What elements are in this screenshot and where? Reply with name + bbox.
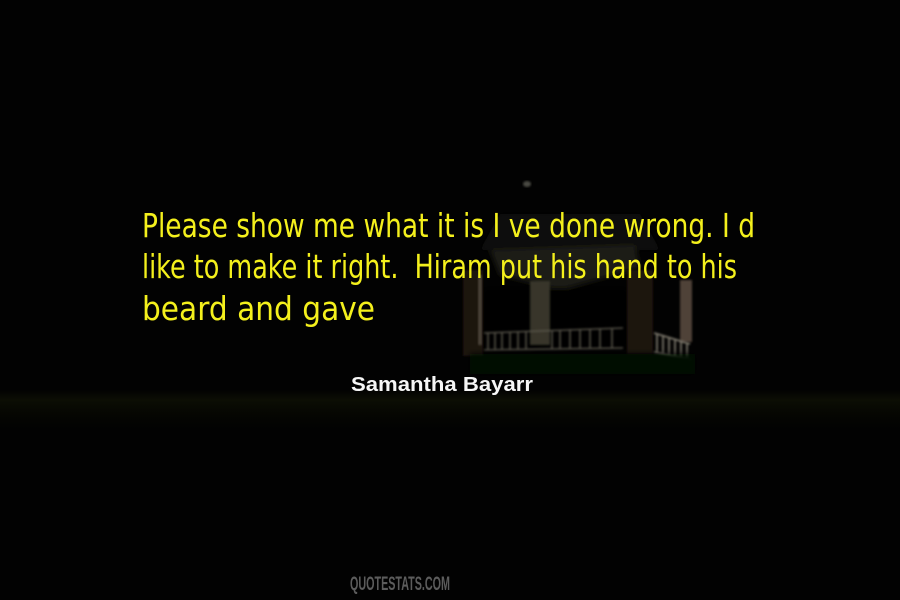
- left dark column: [463, 270, 483, 356]
- pavilion roof: [480, 214, 660, 348]
- background photo: pavilion at night: [463, 181, 695, 374]
- right railing: [654, 333, 690, 360]
- author name: Samantha Bayarr: [351, 373, 533, 396]
- pavilion base: [470, 354, 695, 374]
- front railing: [484, 328, 623, 350]
- quote text: [142, 206, 755, 328]
- right dark column: [627, 270, 653, 354]
- moon: [523, 181, 531, 187]
- right light pillar: [680, 280, 692, 342]
- quote line 3: beard and gave: [142, 289, 375, 328]
- quote line 2: like to make it right. Hiram put his hand to his: [142, 247, 737, 286]
- site credit: QUOTESTATS.COM: [350, 574, 450, 595]
- quote line 1: Please show me what it is I ve done wrong. I d: [142, 206, 755, 245]
- left light strip: [478, 275, 482, 345]
- centre light pillar: [530, 281, 550, 345]
